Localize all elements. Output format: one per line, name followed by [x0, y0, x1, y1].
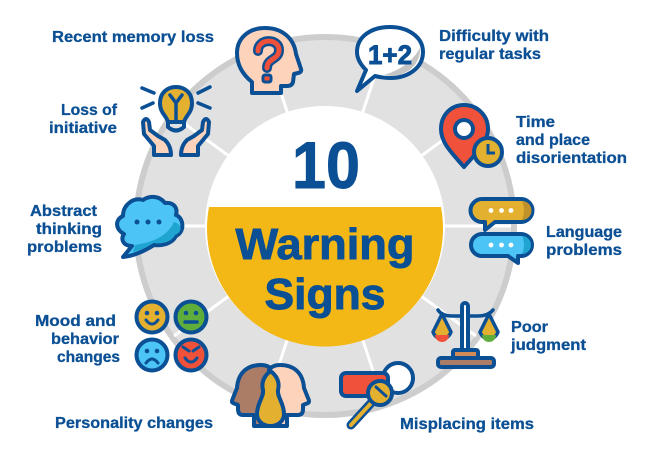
title: Warning Signs: Signs [264, 270, 386, 319]
icon: speech bubble 1+2 [357, 27, 423, 91]
label: recent memory loss: Recent memory loss [52, 29, 214, 46]
title: Warning Signs: Warning [236, 220, 414, 269]
label: loss of initiative [49, 102, 118, 137]
label: time and place disorientation [516, 114, 627, 167]
icon: two heads [232, 365, 309, 426]
label: personality changes: Personality changes [55, 415, 213, 432]
label: abstract thinking problems: problems [27, 239, 102, 256]
label: language problems: Language [546, 224, 622, 241]
icon: key with tag [341, 363, 413, 425]
label: misplacing items: Misplacing items [400, 416, 534, 433]
yellow centre segment [207, 207, 443, 347]
label: poor judgment [510, 319, 587, 354]
icon: mood faces [136, 302, 206, 370]
label: time and place disorientation: disorientation [516, 150, 627, 167]
wheel background [133, 34, 517, 418]
icon: thought cloud [117, 197, 182, 257]
label: difficulty with regular tasks: regular tasks [439, 46, 541, 63]
label: time and place disorientation: and place [516, 132, 590, 149]
icon: map pin with clock [441, 105, 502, 167]
label: difficulty with regular tasks [439, 28, 549, 63]
icon: chat bubbles [470, 199, 532, 263]
icon: balance scales [433, 303, 498, 367]
label: poor judgment: Poor [511, 319, 548, 336]
icon: speech bubble 1+2: 1+2 [368, 40, 412, 70]
label: loss of initiative: initiative [49, 120, 117, 137]
label: mood and behavior changes: behavior [51, 331, 119, 348]
title: Warning Signs [236, 220, 414, 319]
label: language problems: problems [546, 242, 622, 259]
label: difficulty with regular tasks: Difficulty with [439, 28, 549, 45]
label: poor judgment: judgment [510, 337, 587, 354]
label: loss of initiative: Loss of [61, 102, 118, 119]
label: abstract thinking problems [27, 203, 102, 256]
label: abstract thinking problems: Abstract [30, 203, 98, 220]
label: language problems [546, 224, 622, 259]
label: mood and behavior changes [35, 313, 120, 366]
label: time and place disorientation: Time [516, 114, 555, 131]
icon: light bulb and hands [142, 87, 210, 155]
label: mood and behavior changes: changes [57, 349, 120, 366]
label: abstract thinking problems: thinking [36, 221, 102, 238]
icon: head with question mark [237, 28, 301, 93]
label: mood and behavior changes: Mood and [35, 313, 116, 330]
title: 10: 10 [292, 128, 360, 202]
